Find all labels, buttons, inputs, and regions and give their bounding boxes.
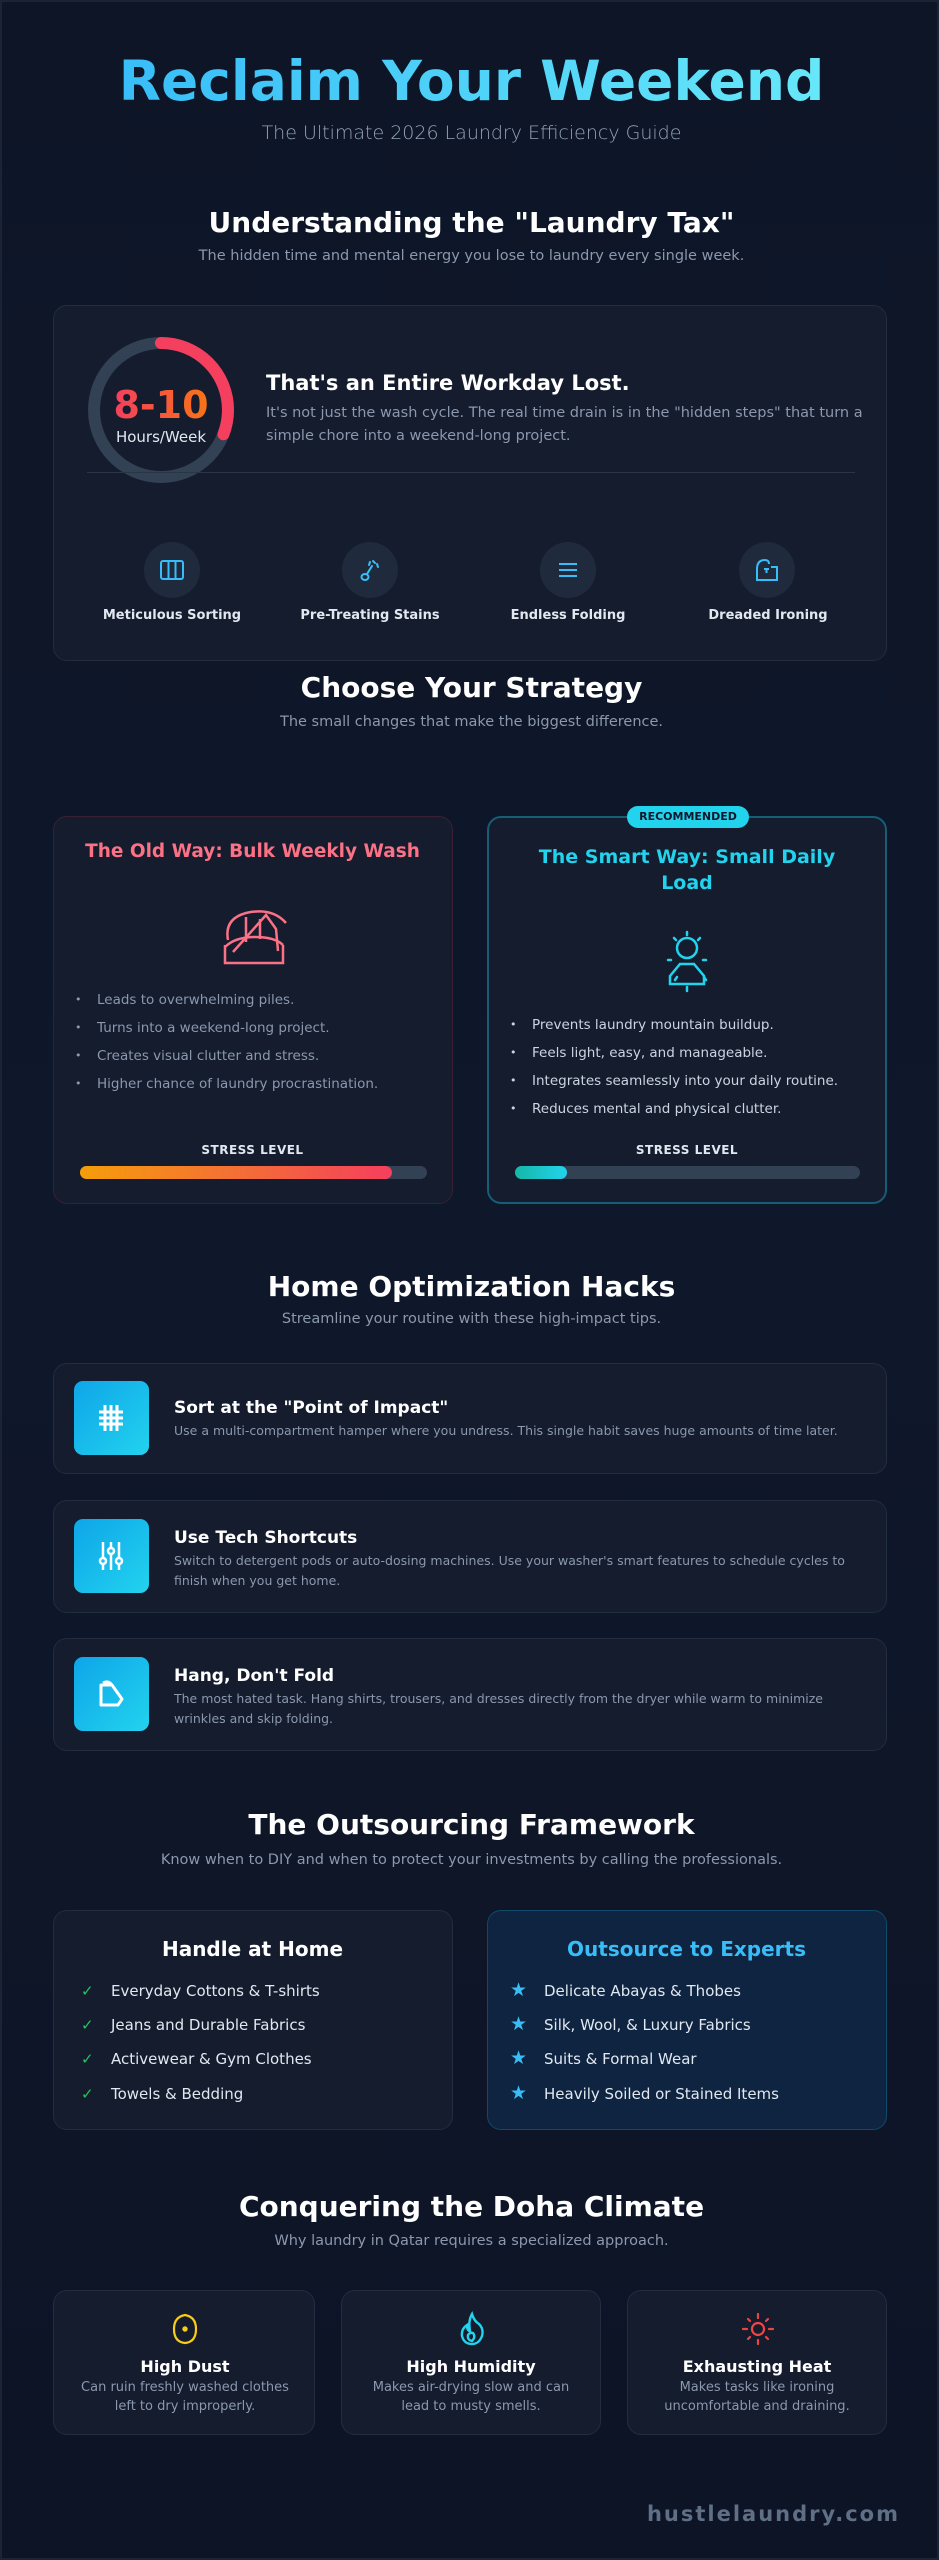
hack text: Use a multi-compartment hamper where you undress. This single habit saves huge amounts of time later.	[174, 1423, 838, 1438]
panel: heat	[627, 2290, 887, 2435]
smart way bullets: Feels light, easy, and manageable.	[532, 1045, 767, 1061]
heading: climate: Conquering the Doha Climate	[239, 2190, 704, 2223]
heading: strategy: Choose Your Strategy	[301, 671, 642, 704]
subheading: outsourcing: Know when to DIY and when to protect your investments by calling the professionals.	[161, 1852, 782, 1868]
icon: happy person	[666, 930, 708, 992]
panel: laundry tax	[53, 305, 887, 661]
donut chart: 8-10 hours	[88, 337, 234, 483]
list: home items: ✓	[81, 2085, 94, 2103]
text: heat: Makes tasks like ironing uncomfortable and draining.	[664, 2380, 850, 2414]
list: outsource items: Suits & Formal Wear	[544, 2050, 697, 2068]
title: outsource: Outsource to Experts	[567, 1937, 806, 1961]
text: dust: Can ruin freshly washed clothes left to dry improperly.	[81, 2380, 289, 2414]
old way bullets: Higher chance of laundry procrastination.	[97, 1076, 378, 1092]
smart way bullets: Reduces mental and physical clutter.	[532, 1101, 781, 1117]
icon: ironing	[739, 542, 795, 598]
list: home items: ✓	[81, 2016, 94, 2034]
text: dust	[81, 2357, 289, 2414]
list: home items: Towels & Bedding	[111, 2085, 243, 2103]
text: humidity	[373, 2357, 569, 2414]
hack title: Use Tech Shortcuts	[174, 1528, 357, 1548]
icon: stains	[342, 542, 398, 598]
text block: workday lost: That's an Entire Workday Lost.	[266, 371, 630, 395]
panel: hack sort	[53, 1363, 887, 1474]
title: Reclaim Your Weekend	[119, 49, 824, 113]
icon: sorting	[144, 542, 200, 598]
subheading: strategy: The small changes that make the biggest difference.	[280, 714, 663, 730]
icon: grid	[74, 1381, 149, 1455]
icon: overflowing pile	[224, 910, 287, 964]
hack text: Switch to detergent pods or auto-dosing machines. Use your washer's smart features to schedule cycles to finish when you get home.	[174, 1553, 845, 1588]
label: sorting: Meticulous Sorting	[103, 608, 241, 623]
list: outsource items: ★	[510, 2047, 527, 2069]
heading: laundry tax: Understanding the "Laundry Tax"	[209, 206, 734, 239]
donut chart: 8-10 hours: Hours/Week	[116, 428, 206, 446]
subheading: hacks: Streamline your routine with these high-impact tips.	[282, 1311, 661, 1327]
heading: hacks: Home Optimization Hacks	[268, 1270, 675, 1303]
subheading: climate: Why laundry in Qatar requires a specialized approach.	[274, 2233, 669, 2249]
footer: brand: hustlelaundry.com	[647, 2502, 900, 2526]
list: home items	[81, 1982, 320, 2103]
text: humidity: Makes air-drying slow and can lead to musty smells.	[373, 2380, 569, 2414]
stress bar: high	[80, 1166, 427, 1179]
list: outsource items	[510, 1979, 779, 2104]
text: heat	[664, 2357, 850, 2414]
panel: humidity	[341, 2290, 601, 2435]
smart way title: The Smart Way: Small Daily Load	[539, 846, 835, 894]
panel: hack hang	[53, 1638, 887, 1751]
old way bullets	[76, 992, 378, 1092]
subtitle: The Ultimate 2026 Laundry Efficiency Guide	[262, 122, 681, 144]
list: outsource items: ★	[510, 2013, 527, 2035]
icon: sliders	[74, 1519, 149, 1593]
label: folding: Endless Folding	[511, 608, 625, 623]
list: outsource items: Delicate Abayas & Thobes	[544, 1982, 741, 2000]
title: handle at home: Handle at Home	[162, 1937, 343, 1961]
label: ironing: Dreaded Ironing	[708, 608, 828, 623]
smart way bullets	[512, 1017, 838, 1117]
text: dust: High Dust	[140, 2357, 230, 2376]
list: home items: Activewear & Gym Clothes	[111, 2050, 312, 2068]
icon: dust	[172, 2314, 198, 2344]
badge: recommended: RECOMMENDED	[639, 810, 737, 823]
old way bullets: Turns into a weekend-long project.	[97, 1020, 330, 1036]
panel: old way	[53, 816, 453, 1204]
panel: outsource	[487, 1910, 887, 2130]
panel: smart way	[487, 816, 887, 1204]
subheading: laundry tax: The hidden time and mental energy you lose to laundry every single week.	[199, 248, 744, 264]
hack title: Sort at the "Point of Impact"	[174, 1398, 448, 1418]
list: outsource items: Heavily Soiled or Stained Items	[544, 2085, 779, 2103]
donut chart: 8-10 hours: 8-10	[113, 383, 209, 427]
old way bullets: Creates visual clutter and stress.	[97, 1048, 319, 1064]
panel: dust	[53, 2290, 315, 2435]
list: outsource items: ★	[510, 1979, 527, 2001]
icon: flame	[460, 2311, 484, 2346]
list: outsource items: ★	[510, 2082, 527, 2104]
stress label: STRESS LEVEL	[201, 1143, 304, 1157]
icon: sun	[742, 2312, 774, 2346]
old way bullets: Leads to overwhelming piles.	[97, 992, 294, 1008]
panel: hack tech	[53, 1500, 887, 1613]
list: home items: ✓	[81, 1982, 94, 2000]
stress label: STRESS LEVEL	[636, 1143, 738, 1157]
heading: outsourcing: The Outsourcing Framework	[248, 1808, 695, 1841]
smart way bullets: Prevents laundry mountain buildup.	[532, 1017, 774, 1033]
label: stains: Pre-Treating Stains	[300, 608, 440, 623]
old way title: The Old Way: Bulk Weekly Wash	[85, 841, 420, 862]
hack text: The most hated task. Hang shirts, trousers, and dresses directly from the dryer while warm to minimize wrinkles and skip folding.	[174, 1691, 823, 1726]
badge: recommended	[627, 806, 749, 828]
icon: folding	[540, 542, 596, 598]
text: humidity: High Humidity	[406, 2357, 536, 2376]
text block: workday lost: It's not just the wash cycle. The real time drain is in the "hidden steps" that turn a simple chore into a weekend-long project.	[266, 405, 863, 444]
text block: workday lost	[266, 371, 863, 444]
stress bar: low	[515, 1166, 860, 1179]
panel: handle at home	[53, 1910, 453, 2130]
list: home items: ✓	[81, 2050, 94, 2068]
list: outsource items: Silk, Wool, & Luxury Fabrics	[544, 2016, 751, 2034]
hack title: Hang, Don't Fold	[174, 1666, 334, 1686]
list: home items: Everyday Cottons & T-shirts	[111, 1982, 320, 2000]
text: heat: Exhausting Heat	[683, 2357, 831, 2376]
smart way bullets: Integrates seamlessly into your daily routine.	[532, 1073, 838, 1089]
list: home items: Jeans and Durable Fabrics	[111, 2016, 305, 2034]
icon: hanger	[74, 1657, 149, 1731]
